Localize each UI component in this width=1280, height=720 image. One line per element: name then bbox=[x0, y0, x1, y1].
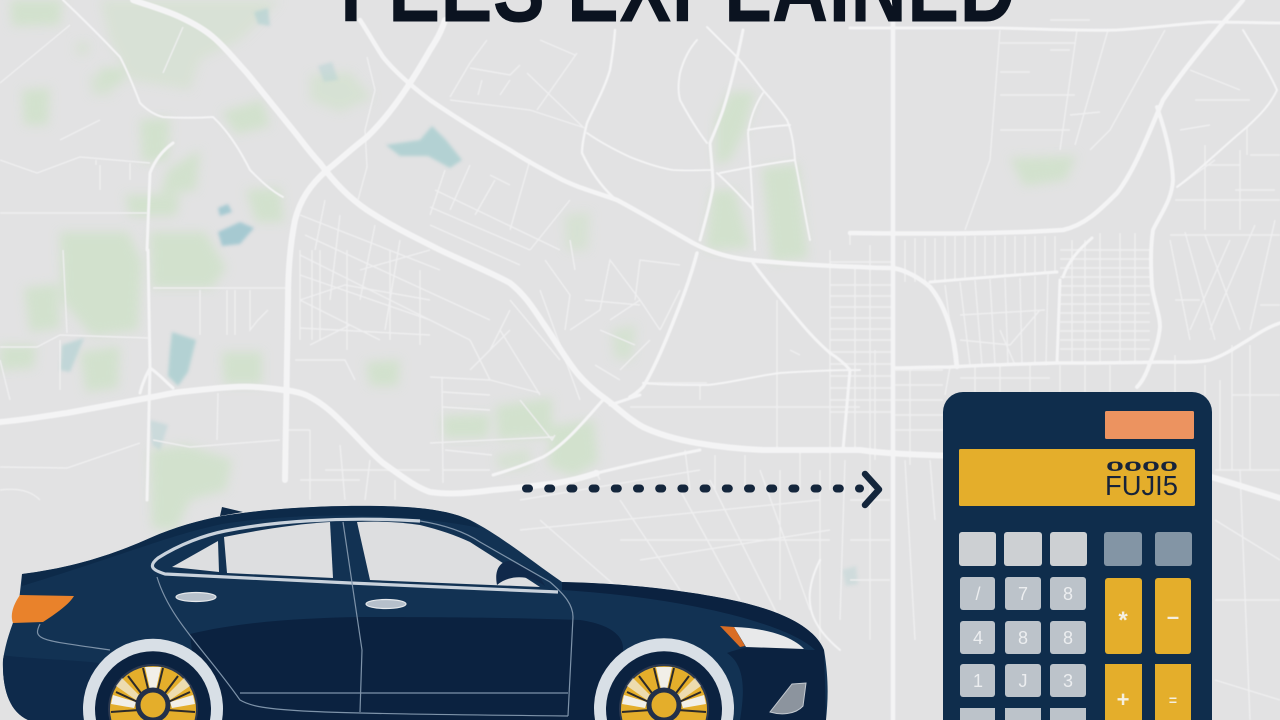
car: fog lamp bbox=[770, 683, 806, 714]
car: side mirror bbox=[496, 561, 545, 586]
calculator: number keys: 8 bbox=[1018, 628, 1028, 648]
calculator: operator keys: * bbox=[1118, 607, 1128, 634]
map: parks bbox=[0, 0, 1076, 530]
car: body shading bbox=[0, 506, 826, 720]
calculator: operator keys: = bbox=[1169, 692, 1177, 708]
calculator: operator keys: + bbox=[1117, 687, 1129, 712]
calculator: number keys: 4 bbox=[973, 628, 983, 648]
calculator: number keys bbox=[960, 577, 1086, 720]
calculator: number keys: 8 bbox=[1063, 584, 1073, 604]
calculator: number keys: / bbox=[975, 584, 981, 604]
car: door handles bbox=[176, 592, 406, 608]
calculator: orange solar panel bbox=[1105, 411, 1194, 439]
calculator: number keys: J bbox=[1018, 671, 1028, 691]
calculator: operator keys: – bbox=[1167, 604, 1179, 629]
arrow: dotted route to calculator bbox=[526, 474, 879, 505]
car: front wheel bbox=[594, 638, 734, 720]
calculator: number keys: 8 bbox=[1063, 628, 1073, 648]
calculator: number keys: 1 bbox=[973, 671, 983, 691]
calculator: operator keys bbox=[1105, 578, 1191, 720]
icon: calculator bbox=[943, 392, 1212, 720]
calculator: top function keys bbox=[959, 532, 1192, 566]
car: body bbox=[3, 506, 828, 720]
calculator: display: FUJI5 bbox=[1105, 470, 1178, 501]
car: windows bbox=[172, 522, 540, 587]
map: lakes bbox=[60, 8, 858, 586]
car: chrome trim bbox=[152, 519, 558, 592]
car: spoiler bbox=[220, 507, 243, 516]
calculator: number keys: 7 bbox=[1018, 584, 1028, 604]
calculator: number keys: 3 bbox=[1063, 671, 1073, 691]
car: front indicator bbox=[720, 626, 745, 647]
car: headlight bbox=[734, 627, 804, 649]
calculator: display: 0000 bbox=[1106, 458, 1178, 474]
car: rear wheel bbox=[83, 639, 223, 720]
car: tail light bbox=[12, 595, 74, 623]
calculator: display bbox=[959, 449, 1195, 506]
car: door seams bbox=[37, 521, 573, 716]
car bbox=[0, 506, 828, 720]
